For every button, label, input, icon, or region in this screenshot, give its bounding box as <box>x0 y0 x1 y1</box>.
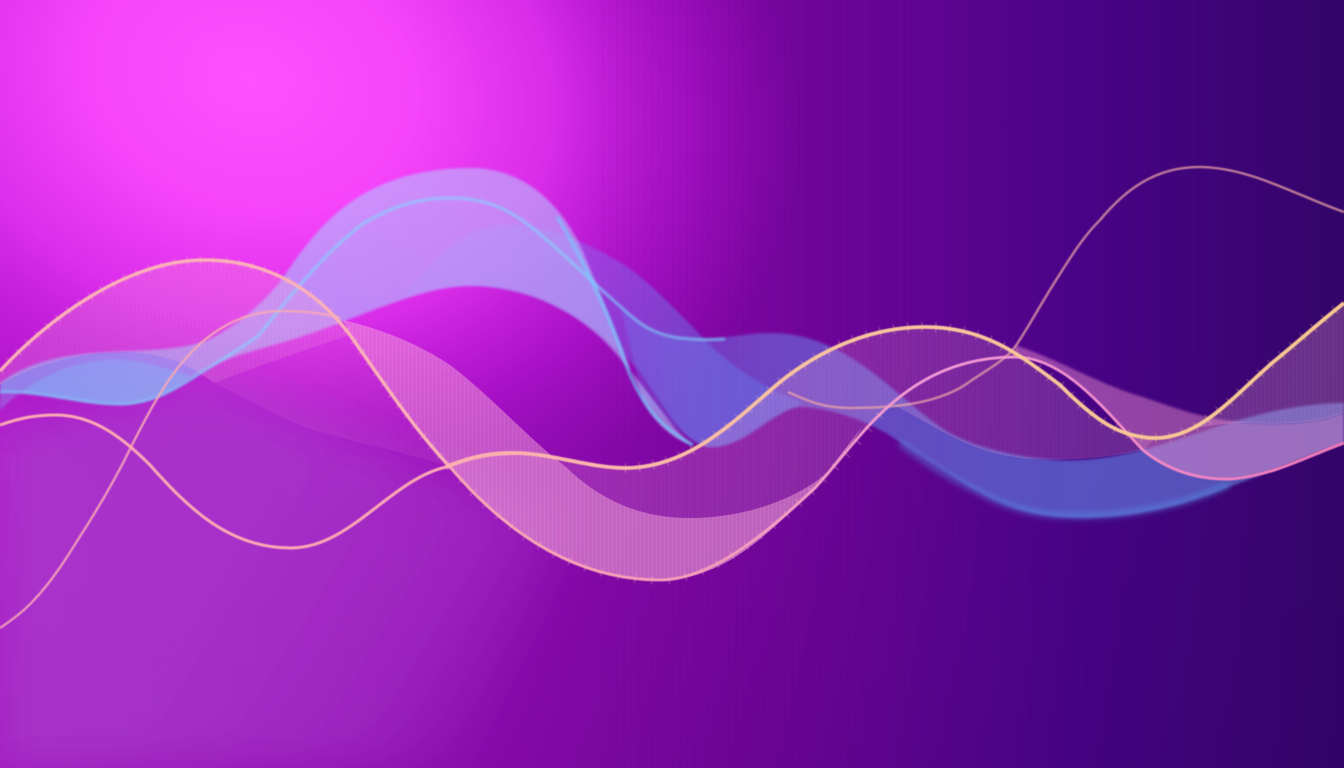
wave: blue ribbon right <box>621 307 1344 518</box>
line: left crest descending to centre <box>0 260 450 467</box>
wave: pink ribbon left <box>0 260 450 467</box>
wave: pink ribbon centre bright band <box>343 320 865 580</box>
line: thin peach wave rising from bottom left <box>0 311 340 628</box>
wave: hatched ribbon far right <box>1156 303 1344 438</box>
wave: blue ribbon upper left <box>0 168 693 445</box>
line: bright blue ribbon lines <box>0 198 725 445</box>
wave: blue ribbon middle <box>400 225 800 447</box>
wave: pink ribbon right <box>1015 345 1344 479</box>
light haze lower left <box>0 380 570 768</box>
wave: pink ribbon centre hatched <box>450 327 1156 580</box>
line: pink ribbon lower edge <box>450 357 1344 580</box>
line: lower left wave joining thick centre line <box>0 415 515 548</box>
line: thick peach wave centre to right <box>446 303 1344 468</box>
line: thin peach wave right <box>788 167 1344 408</box>
